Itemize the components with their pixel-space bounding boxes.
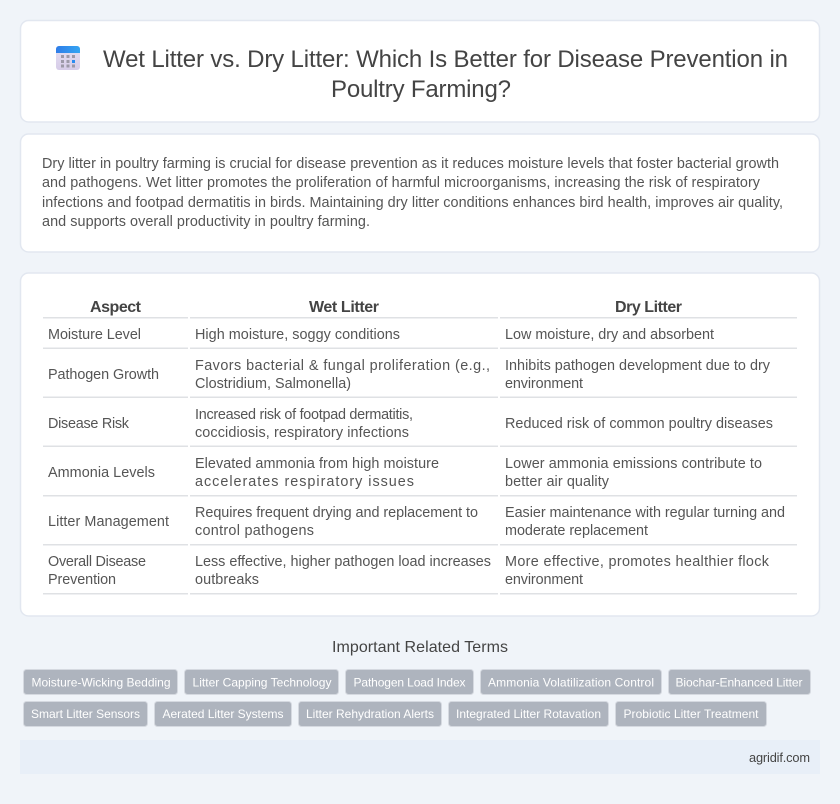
table row: pathogen growth: Favors bacterial & fungal proliferation (e.g., xyxy=(195,358,490,374)
table row: moisture level xyxy=(43,327,797,349)
tag xyxy=(668,670,810,694)
table row: pathogen growth xyxy=(43,358,797,398)
table row: overall disease prevention: More effective, promotes healthier flock xyxy=(505,554,770,570)
tag xyxy=(616,702,766,726)
table row: overall disease prevention xyxy=(43,554,797,594)
tag: Moisture-Wicking Bedding xyxy=(32,676,170,690)
table row: disease risk xyxy=(43,407,797,447)
table header: Wet Litter xyxy=(309,299,379,316)
table row: disease risk: Disease Risk xyxy=(48,416,130,432)
title: Wet Litter vs. Dry Litter: Which Is Better for Disease Prevention in xyxy=(103,46,788,73)
table header: Aspect xyxy=(90,299,142,316)
tag: Litter Capping Technology xyxy=(192,676,332,690)
table row: overall disease prevention: Less effective, higher pathogen load increases xyxy=(195,554,491,570)
table row: pathogen growth: Pathogen Growth xyxy=(48,367,159,383)
tag: Smart Litter Sensors xyxy=(31,707,140,721)
tag xyxy=(298,702,442,726)
tag xyxy=(24,702,148,726)
table row: pathogen growth: Inhibits pathogen development due to dry xyxy=(505,358,771,374)
table row: ammonia levels: Ammonia Levels xyxy=(48,465,155,481)
footer xyxy=(20,740,820,774)
tag xyxy=(184,670,338,694)
table row: ammonia levels xyxy=(43,456,797,496)
table row: ammonia levels: Lower ammonia emissions contribute to xyxy=(505,456,762,472)
table row: litter management: moderate replacement xyxy=(505,523,648,539)
text block: summary paragraph: infections and footpad dermatitis in birds. Maintaining dry litter conditions enhances bird health, improves air quality, xyxy=(42,195,783,211)
panel: title card xyxy=(20,20,820,122)
table row: ammonia levels: Elevated ammonia from high moisture xyxy=(195,456,439,472)
table row: overall disease prevention: environment xyxy=(505,572,583,588)
title: Poultry Farming? xyxy=(331,76,511,103)
table row: litter management: Easier maintenance with regular turning and xyxy=(505,505,785,521)
text block: summary paragraph xyxy=(42,156,783,230)
table row: litter management: control pathogens xyxy=(195,523,314,539)
tag xyxy=(24,670,178,694)
table row: litter management: Litter Management xyxy=(48,514,169,530)
tag: Integrated Litter Rotavation xyxy=(456,707,601,721)
table row: ammonia levels: better air quality xyxy=(505,474,610,490)
footer: agridif.com xyxy=(749,750,810,765)
text block: summary paragraph: and pathogens. Wet litter promotes the proliferation of harmful microorganisms, increasing the risk of respiratory xyxy=(42,175,761,191)
table row: moisture level: High moisture, soggy conditions xyxy=(195,327,400,343)
text block: summary paragraph: Dry litter in poultry farming is crucial for disease prevention as it reduces moisture levels that foster bacterial growth xyxy=(42,156,779,172)
table row: pathogen growth: environment xyxy=(505,376,583,392)
panel: intro text xyxy=(20,134,820,252)
table header: Dry Litter xyxy=(615,299,682,316)
tag: Probiotic Litter Treatment xyxy=(624,707,759,721)
heading: related terms: Important Related Terms xyxy=(332,639,508,656)
table row: litter management: Requires frequent drying and replacement to xyxy=(195,505,478,521)
table row: moisture level: Low moisture, dry and absorbent xyxy=(505,327,714,343)
related term tags xyxy=(24,670,810,726)
table row: overall disease prevention: Prevention xyxy=(48,572,116,588)
table row: ammonia levels: accelerates respiratory issues xyxy=(195,474,414,490)
tag xyxy=(480,670,662,694)
tag: Ammonia Volatilization Control xyxy=(488,676,654,690)
tag: Aerated Litter Systems xyxy=(162,707,284,721)
title xyxy=(103,46,788,103)
table row: moisture level: Moisture Level xyxy=(48,327,141,343)
table row: disease risk: coccidiosis, respiratory infections xyxy=(195,425,409,441)
table row: overall disease prevention: outbreaks xyxy=(195,572,259,588)
table row: litter management xyxy=(43,505,797,546)
tag xyxy=(346,670,474,694)
tag: Litter Rehydration Alerts xyxy=(306,707,434,721)
text block: summary paragraph: and supports overall productivity in poultry farming. xyxy=(42,214,370,230)
table header xyxy=(43,299,797,318)
tag: Pathogen Load Index xyxy=(354,676,466,690)
panel: comparison table xyxy=(20,273,820,616)
tag xyxy=(448,702,608,726)
tag xyxy=(154,702,292,726)
icon: calendar xyxy=(56,46,80,70)
table row: overall disease prevention: Overall Disease xyxy=(48,554,146,570)
tag: Biochar-Enhanced Litter xyxy=(676,676,802,690)
table row: disease risk: Reduced risk of common poultry diseases xyxy=(505,416,773,432)
table row: pathogen growth: Clostridium, Salmonella) xyxy=(195,376,351,392)
table row: disease risk: Increased risk of footpad dermatitis, xyxy=(195,407,413,423)
